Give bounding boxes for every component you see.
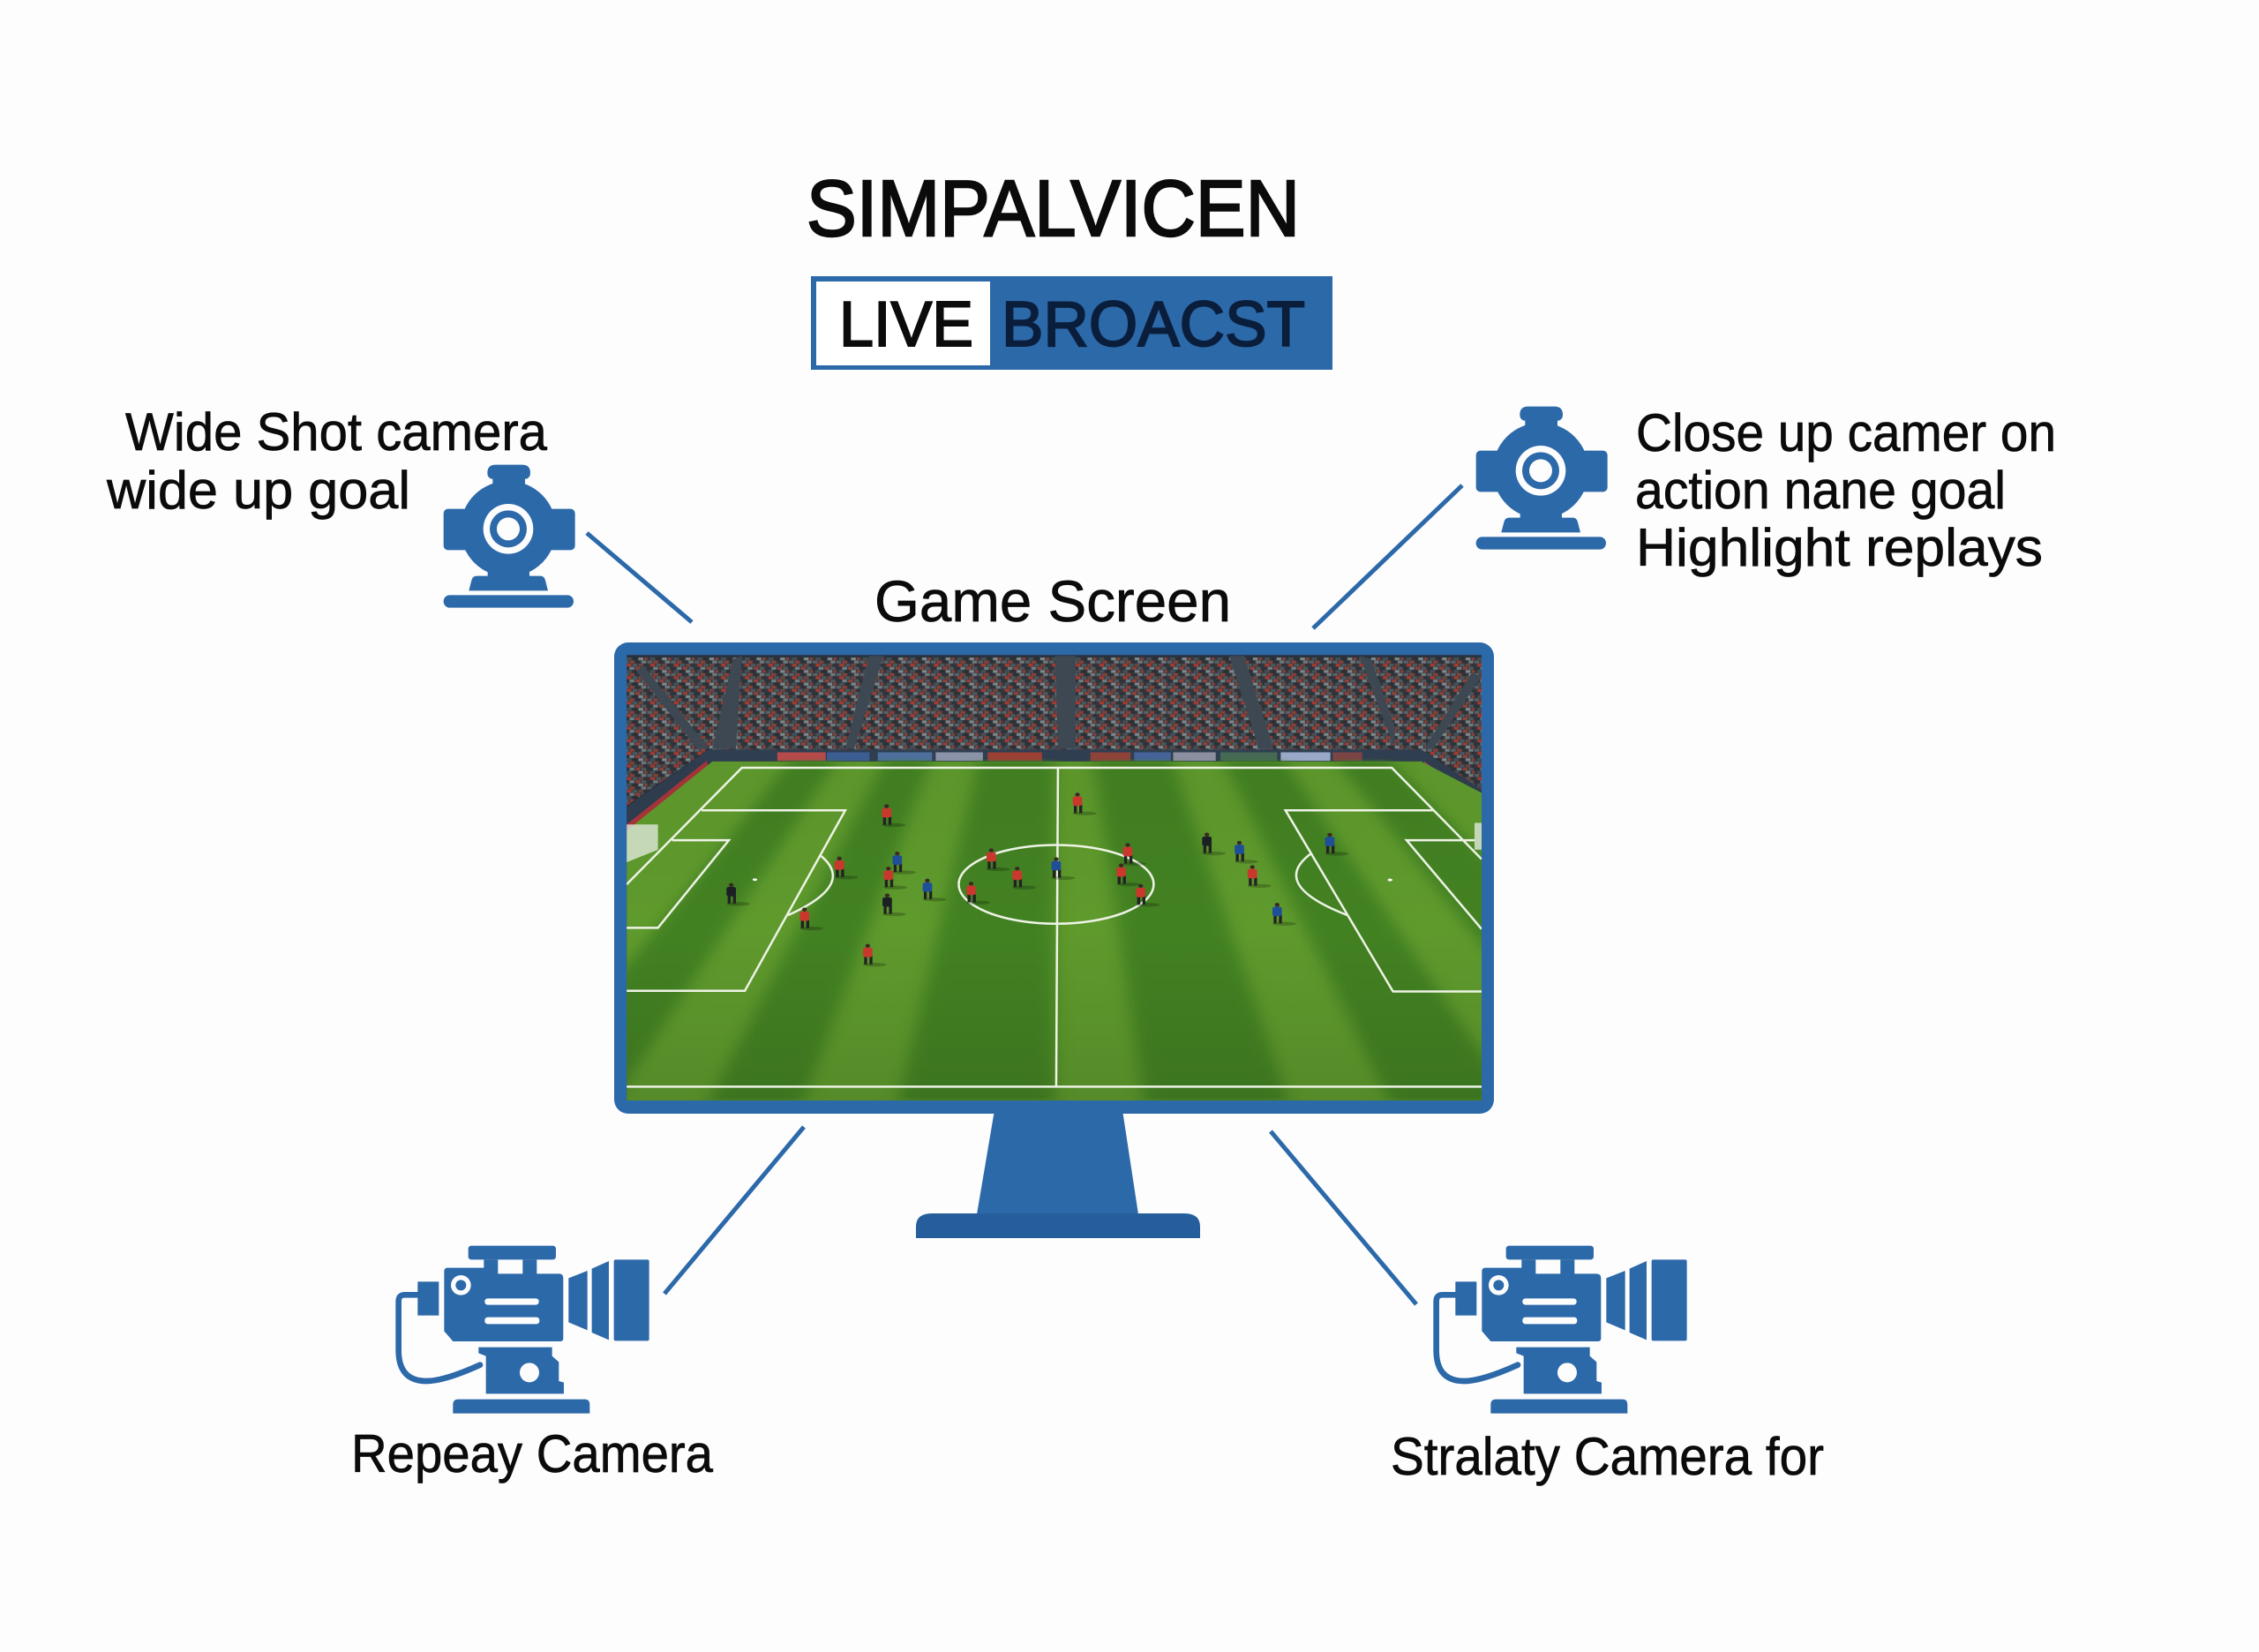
close up label: Highlight replays: [1636, 518, 2043, 577]
close up label: [1635, 403, 2056, 577]
arrow: replay camera to screen: [664, 1127, 804, 1294]
close up label: action nane goal: [1635, 461, 2006, 520]
title: SIMPALVICEN: [807, 165, 1300, 253]
pitch grass: [627, 759, 1482, 1101]
icon: replay camera: [399, 1246, 649, 1414]
wide shot label: [106, 402, 548, 520]
monitor stand: [977, 1110, 1138, 1214]
arrow: strategy camera to screen: [1271, 1131, 1416, 1304]
game screen heading: Game Screen: [874, 568, 1231, 634]
icon: strategy camera: [1437, 1246, 1687, 1414]
strategy camera label: Stralaty Camera for: [1391, 1427, 1824, 1486]
banner word: live: LIVE: [839, 289, 973, 360]
icon: wide shot camera: [444, 465, 575, 608]
stadium crowd: [627, 656, 1482, 806]
goals: [627, 822, 1482, 862]
pitch lines: [627, 768, 1482, 1086]
wide shot label: Wide Shot camera: [125, 402, 548, 462]
screen: soccer match: [627, 655, 1482, 1101]
wide shot label: wide up goal: [106, 461, 410, 520]
replay camera label: Repeay Camera: [351, 1424, 714, 1483]
players: [726, 792, 1392, 966]
arrow: close up to screen: [1313, 485, 1462, 628]
banner: live broadcast: [811, 276, 1332, 370]
monitor: [614, 642, 1494, 1238]
arrow: wide shot to screen: [587, 533, 692, 622]
advertising boards: [627, 752, 1482, 837]
monitor foot: [916, 1213, 1200, 1238]
banner word: broadcast: BROACST: [1002, 289, 1305, 360]
pitch wall: [627, 749, 1482, 830]
monitor frame: [614, 642, 1494, 1114]
icon: close up camera: [1476, 407, 1608, 550]
close up label: Close up camer on: [1636, 403, 2056, 462]
